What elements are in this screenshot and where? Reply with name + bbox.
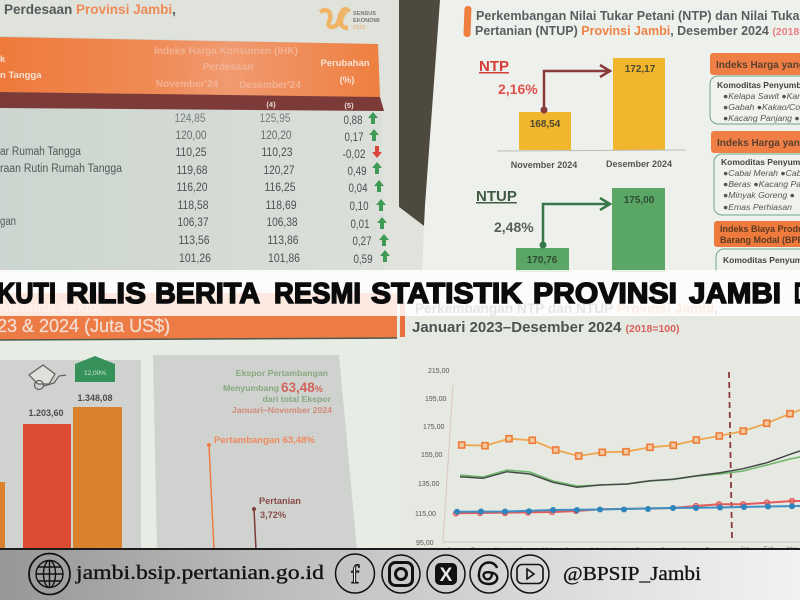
table rows: 116,25 (264, 182, 296, 194)
panel heading band: Menurut Sektor (0, 299, 103, 316)
line chart: 175,00 (423, 424, 445, 431)
callout: price index received (710, 53, 800, 124)
panel: export by sector photo (0, 272, 399, 550)
table header band: Perubahan (320, 58, 370, 69)
table rows: ar Rumah Tangga (0, 146, 82, 158)
table rows: 0,04 (348, 183, 368, 195)
table header band: n Tangga (0, 70, 42, 81)
panel: mining export share: Pertanian (259, 496, 301, 506)
table rows: 118,58 (178, 200, 208, 212)
table rows: 0,59 (354, 254, 372, 266)
panel: mining export share: Januari–November 2024 (232, 405, 332, 415)
table header band: Desember'24 (239, 80, 301, 91)
line chart: Apr (518, 548, 528, 554)
table header band: November'24 (156, 79, 219, 90)
table rows: 124,85 (174, 113, 206, 125)
table rows: 101,26 (179, 253, 211, 265)
table rows: 119,68 (176, 165, 208, 177)
table header band: Perdesaan (203, 62, 253, 73)
footer bar (0, 549, 800, 600)
NTP chart: 168,54 (530, 119, 561, 130)
table title: Perdesaan Provinsi Jambi, (4, 2, 176, 17)
line chart: 215,00 (428, 368, 450, 375)
icon: instagram (382, 555, 420, 593)
NTP chart: 172,17 (625, 64, 656, 75)
banner strip: PROVINSI (533, 278, 677, 310)
NTP chart (479, 58, 686, 170)
table rows: 113,56 (178, 235, 210, 247)
NTP chart: 2,16% (498, 81, 538, 97)
line chart: 95,00 (416, 540, 434, 547)
callout: price index paid (711, 131, 800, 215)
panel: mining export share (153, 355, 357, 550)
panel heading band: 23 & 2024 (Juta US$) (0, 316, 170, 336)
panel title (475, 9, 800, 38)
line chart: Sep (636, 548, 647, 554)
table rows: 125,95 (260, 113, 290, 125)
panel: bar chart: 1.203,60 (28, 408, 64, 418)
line chart: 155,00 (421, 452, 443, 459)
logo: Sensus Ekonomi 2025: SENSUS (353, 11, 376, 17)
line chart: Des (706, 548, 716, 554)
panel: NTP and NTUP photo (399, 0, 800, 289)
banner strip: RESMI (274, 278, 361, 310)
callout: price index received: ●Kacang Panjang ● (723, 113, 800, 123)
panel accent bar (463, 6, 472, 37)
line chart (415, 368, 800, 554)
banner strip: JAMBI (689, 278, 781, 310)
NTP chart: Desember 2024 (606, 159, 672, 169)
logo: Sensus Ekonomi 2025 (320, 9, 380, 31)
logo: Sensus Ekonomi 2025: EKONOMI (353, 18, 380, 24)
table rows (0, 113, 372, 266)
table rows: 118,69 (266, 200, 296, 212)
table rows: 0,17 (344, 132, 364, 144)
panel: mining export share: 3,72% (260, 510, 286, 520)
panel: mining export share: Pertambangan 63,48% (214, 435, 315, 446)
line chart: Jul (590, 548, 598, 554)
line chart: 115,00 (415, 511, 436, 518)
table rows: 0,49 (348, 166, 366, 178)
NTP chart: November 2024 (511, 160, 577, 170)
icon: youtube (511, 555, 549, 593)
line chart: 195,00 (425, 396, 447, 403)
social handle: @BPSIP_Jambi (563, 563, 701, 585)
line chart: Jan (740, 547, 750, 553)
panel: mining export share: Menyumbang (223, 383, 279, 393)
line chart: Mei (542, 548, 552, 554)
icon: X: X (440, 565, 453, 586)
banner strip: STATISTIK (371, 278, 522, 310)
table rows: 120,27 (264, 165, 294, 177)
table rows: 101,86 (268, 253, 300, 265)
table rows: -0,02 (342, 149, 366, 161)
line chart: Mar (495, 548, 505, 554)
NTUP chart: NTUP (476, 188, 517, 205)
table rows: 106,37 (178, 217, 208, 229)
website address: jambi.bsip.pertanian.go.id (75, 562, 324, 584)
table rows: 0,88 (344, 115, 362, 127)
icon: wheelbarrow (29, 365, 66, 390)
chart heading (400, 301, 718, 337)
table header band: (%) (340, 75, 354, 86)
change arrows (368, 112, 390, 262)
callout: production cost index (714, 221, 800, 289)
table rows: 113,86 (268, 235, 298, 247)
icon: X (427, 555, 465, 593)
table header band: (5) (344, 101, 354, 110)
line chart: Feb (764, 547, 775, 553)
NTUP chart: 170,76 (527, 255, 558, 266)
line chart: 135,00 (418, 481, 440, 488)
icon: facebook (336, 554, 374, 593)
panel: mining export share: 63,48% (281, 380, 323, 395)
banner strip: BERITA (155, 278, 260, 310)
panel: bar chart (0, 356, 141, 550)
panel: mining export share: Ekspor Pertambangan (236, 368, 328, 378)
line chart: Okt (660, 548, 670, 554)
growth badge (75, 356, 115, 382)
NTP chart: NTP (479, 58, 509, 75)
table rows: raan Rutin Rumah Tangga (0, 163, 123, 175)
icon: globe (29, 554, 70, 594)
growth badge: 12,00% (84, 370, 106, 377)
banner strip: RILIS (66, 278, 146, 310)
line chart: Jun (565, 548, 575, 554)
callout: price index paid: ●Minyak Goreng ● (723, 190, 795, 200)
panel: mining export share: dari total Ekspor (262, 394, 332, 404)
table rows: 0,27 (352, 236, 372, 248)
table rows: 120,20 (260, 130, 292, 142)
table rows: gan (0, 216, 16, 228)
table rows: 106,38 (266, 217, 298, 229)
table rows: 110,25 (176, 147, 206, 159)
panel: IHK perdesaan table photo (0, 0, 399, 272)
line chart: Jan (447, 548, 457, 554)
table rows: 0,10 (350, 201, 368, 213)
table rows: 0,01 (350, 219, 370, 231)
table header band: Indeks Harga Konsumen (IHK) (154, 46, 298, 57)
callout: price index paid: ●Emas Perhiasan (723, 202, 792, 212)
table rows: 120,00 (176, 130, 206, 142)
panel: bar chart: 1.348,08 (77, 393, 113, 403)
banner strip (0, 270, 800, 316)
table header band: k (0, 54, 6, 65)
table rows: 116,20 (176, 182, 208, 194)
panel: NTP NTUP line chart photo (399, 272, 800, 554)
logo: Sensus Ekonomi 2025: 2025 (353, 25, 365, 31)
NTUP chart (476, 188, 665, 272)
icon: threads (470, 555, 508, 593)
chart heading: Januari 2023–Desember 2024 (2018=100) (412, 319, 680, 336)
panel heading band (0, 293, 397, 340)
line chart: Agt (612, 548, 622, 554)
table rows: 110,23 (262, 147, 292, 159)
icon: facebook: f (351, 560, 360, 589)
table header band: (4) (266, 100, 276, 109)
line chart: Mar (787, 547, 797, 553)
chart heading: Perkembangan NTP dan NTUP Provinsi Jambi, (415, 301, 718, 316)
table header band (0, 37, 384, 111)
line chart: Feb (471, 548, 482, 554)
line chart: Nov (683, 548, 693, 554)
NTUP chart: 2,48% (494, 219, 534, 235)
NTUP chart: 175,00 (624, 195, 655, 206)
